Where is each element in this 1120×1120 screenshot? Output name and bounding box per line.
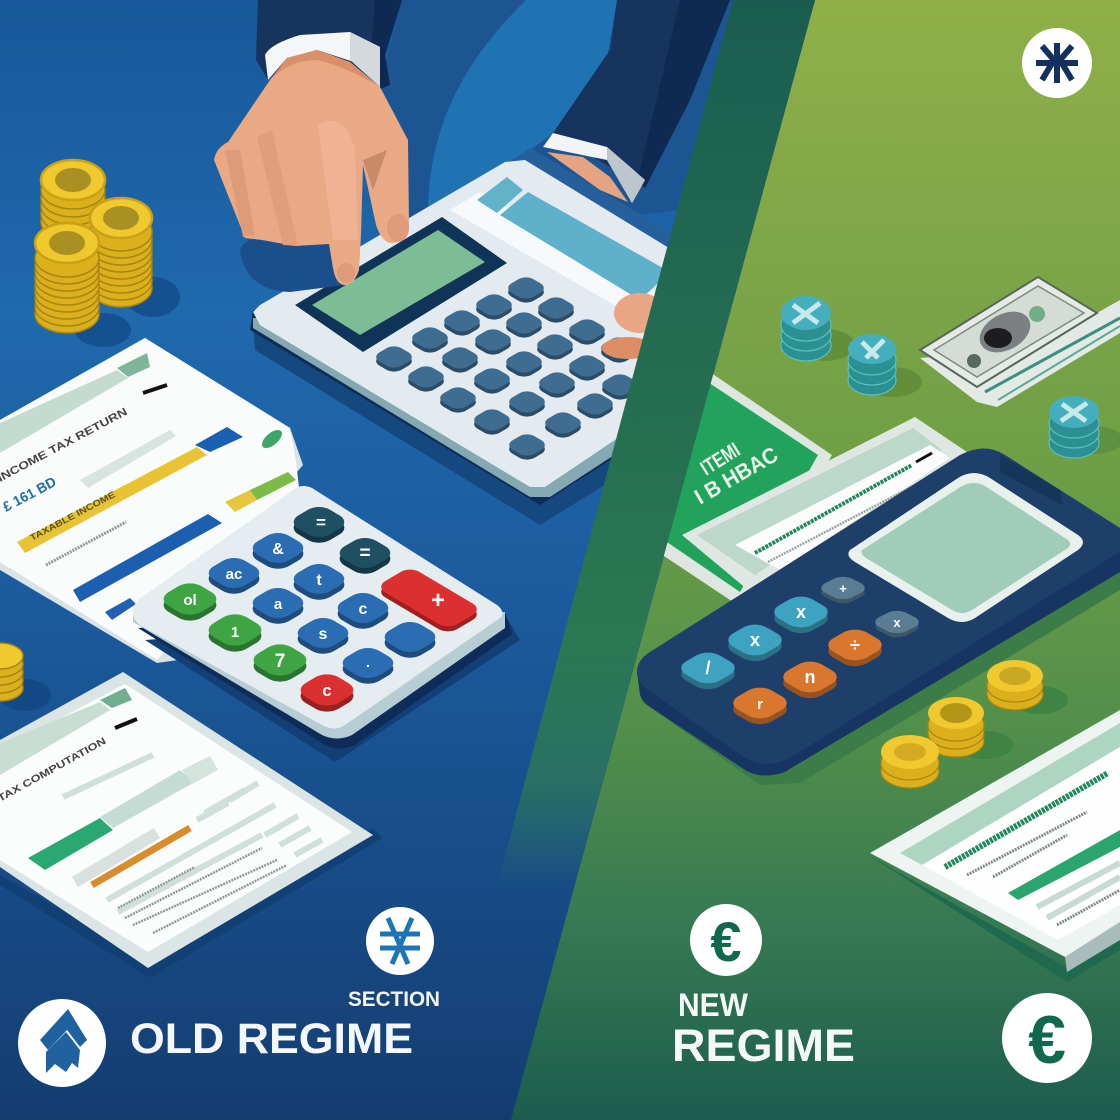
calculator face (637, 448, 1120, 764)
euro icon small (690, 904, 762, 976)
keypad (372, 275, 642, 462)
note seal green (1029, 306, 1045, 322)
key labels: & (272, 541, 284, 558)
yellow bar (17, 447, 207, 553)
teal stack three (1049, 396, 1120, 458)
top note (920, 277, 1097, 387)
teal stack one (781, 296, 855, 361)
orange bar (92, 828, 190, 885)
key labels: ÷ (850, 635, 860, 655)
calculator face (253, 160, 668, 487)
euro icon large: € (1028, 1002, 1066, 1078)
coin stack front (35, 223, 99, 333)
green text (945, 773, 1108, 867)
calculator face (133, 486, 502, 728)
header bar (0, 370, 128, 453)
key labels: 7 (275, 651, 285, 672)
blue tag (195, 427, 243, 452)
key labels: x (750, 630, 760, 650)
dark keys (287, 503, 397, 578)
note seal gray (967, 354, 981, 368)
right sleeve and cuff (543, 0, 730, 203)
green sheet (645, 357, 818, 592)
teal stack two (848, 334, 922, 397)
key labels: r (757, 696, 763, 713)
document: top left stack (0, 338, 320, 663)
key labels (183, 513, 445, 700)
key labels: t (316, 572, 322, 589)
key labels (705, 581, 901, 713)
left sleeve and cuff (256, 0, 402, 90)
doc inner white (735, 445, 950, 570)
gold stack two (928, 697, 1013, 759)
gold coin stacks: top left (35, 160, 180, 347)
old regime label: OLD REGIME (130, 1015, 413, 1063)
key labels: c (322, 681, 332, 700)
black mark (143, 385, 167, 393)
key labels: c (359, 601, 368, 618)
amount text: £ 161 BD (0, 473, 59, 515)
background: dark shape behind hand (380, 0, 526, 240)
gray text row (46, 522, 126, 565)
calculator shadow (640, 570, 1120, 785)
green text lines (755, 465, 912, 553)
teal panel large (500, 192, 670, 300)
central diagonal band (496, 0, 815, 890)
coin stack back (41, 160, 105, 241)
new label: NEW (678, 987, 749, 1023)
note portrait (973, 303, 1037, 361)
coins: gold right (881, 660, 1068, 788)
red plus key (376, 566, 482, 635)
document: bottom left (0, 672, 382, 978)
screen (312, 230, 485, 335)
green sheet text: I B HBAC (690, 442, 782, 509)
green tab (250, 472, 296, 500)
gray label strip (75, 833, 157, 882)
pale rows (63, 755, 322, 912)
screen bezel (295, 217, 507, 352)
key labels: . (366, 654, 370, 670)
background: new regime green (511, 0, 1120, 1120)
section label: SECTION (348, 988, 440, 1011)
gold stack one (987, 660, 1068, 714)
doc edge (0, 672, 373, 968)
gray rows (967, 812, 1120, 925)
screen frame (848, 473, 1083, 622)
note inner (934, 286, 1084, 377)
red key C (294, 670, 360, 716)
coin stack right (90, 198, 152, 307)
doc sheet (870, 710, 1120, 957)
coin shadow right (126, 277, 180, 317)
key labels: x (893, 615, 901, 630)
yellow tab (225, 490, 257, 512)
black mark (115, 719, 137, 728)
screen (862, 483, 1070, 613)
note stack stripes (985, 318, 1120, 392)
document: centre right (682, 417, 967, 600)
background: light blue region (428, 0, 617, 215)
euro icon small: € (710, 910, 742, 973)
note stack (920, 300, 1120, 407)
key labels: = (316, 513, 326, 532)
calculator base (138, 612, 512, 748)
calculator side (133, 612, 505, 738)
yellow bar text: TAXABLE INCOME (28, 489, 117, 543)
teal keys (674, 593, 835, 693)
calculator side (253, 318, 616, 497)
header tab (100, 688, 132, 708)
calculator base (250, 310, 612, 505)
calculator side (637, 540, 1120, 776)
doc shadow (870, 856, 1120, 982)
header bar (0, 702, 110, 775)
header band (900, 723, 1120, 865)
gold stack three (881, 735, 939, 788)
small blue bar (105, 598, 136, 620)
section icon (366, 907, 434, 975)
key labels: n (804, 667, 816, 687)
calculator shadow (145, 615, 520, 762)
calculator: new regime (637, 448, 1120, 785)
document: bottom right (870, 710, 1120, 982)
header tab (117, 353, 150, 377)
top groove (1000, 455, 1062, 505)
doc sheet (0, 684, 352, 952)
doc shadow (0, 828, 382, 978)
calculator: centre colored keys (133, 472, 520, 762)
pale block right (182, 756, 218, 784)
doc edge (682, 417, 967, 600)
doc inner pale (697, 428, 942, 575)
coin shadow front (75, 313, 131, 347)
paper lower sheets (0, 338, 320, 663)
green bar (28, 818, 113, 870)
euro icon large (1002, 993, 1092, 1083)
fingers on right of calculator (614, 293, 654, 333)
key labels: ac (226, 566, 242, 583)
pointing hand (214, 50, 409, 285)
key labels: + (431, 587, 445, 614)
key labels: 1 (231, 624, 239, 641)
teal panel small (477, 177, 523, 213)
pale row (80, 430, 176, 488)
home icon (18, 999, 106, 1087)
calculator shadow (254, 332, 610, 525)
doc side (1065, 922, 1120, 972)
key labels: + (839, 581, 847, 596)
blue keys (202, 529, 442, 688)
top right currency icon (1022, 28, 1092, 98)
regime label: REGIME (672, 1020, 855, 1071)
black mark (916, 453, 932, 462)
slate keys (816, 574, 924, 640)
gold coin stack: left edge (0, 643, 51, 711)
dotted lines (118, 848, 287, 933)
key labels: ol (183, 592, 197, 609)
calculator: top (old regime) (250, 148, 671, 525)
banknote stack (920, 277, 1120, 407)
background: right dark shape (530, 0, 733, 215)
white inner (922, 747, 1120, 940)
green keys (157, 579, 313, 686)
note portrait dark (984, 328, 1012, 348)
green sheet text: ITEMI (696, 438, 744, 480)
key labels: = (359, 543, 371, 564)
back cover (510, 148, 671, 246)
key labels: s (319, 626, 328, 643)
gray text lines (768, 472, 940, 562)
key labels: a (274, 596, 283, 613)
green bar (1008, 830, 1120, 900)
pale rows (1037, 863, 1120, 918)
orange keys (726, 626, 889, 728)
coins: teal stacks (781, 296, 1120, 458)
display strip (450, 192, 656, 306)
green check badge (259, 427, 285, 451)
pale block (100, 770, 195, 828)
hand shadow (240, 239, 345, 292)
blue bar (73, 514, 222, 602)
green sheet edge (640, 345, 832, 610)
green document behind (640, 345, 832, 610)
key labels: / (705, 658, 711, 678)
key labels: x (796, 602, 806, 622)
paper main sheet (0, 338, 300, 660)
